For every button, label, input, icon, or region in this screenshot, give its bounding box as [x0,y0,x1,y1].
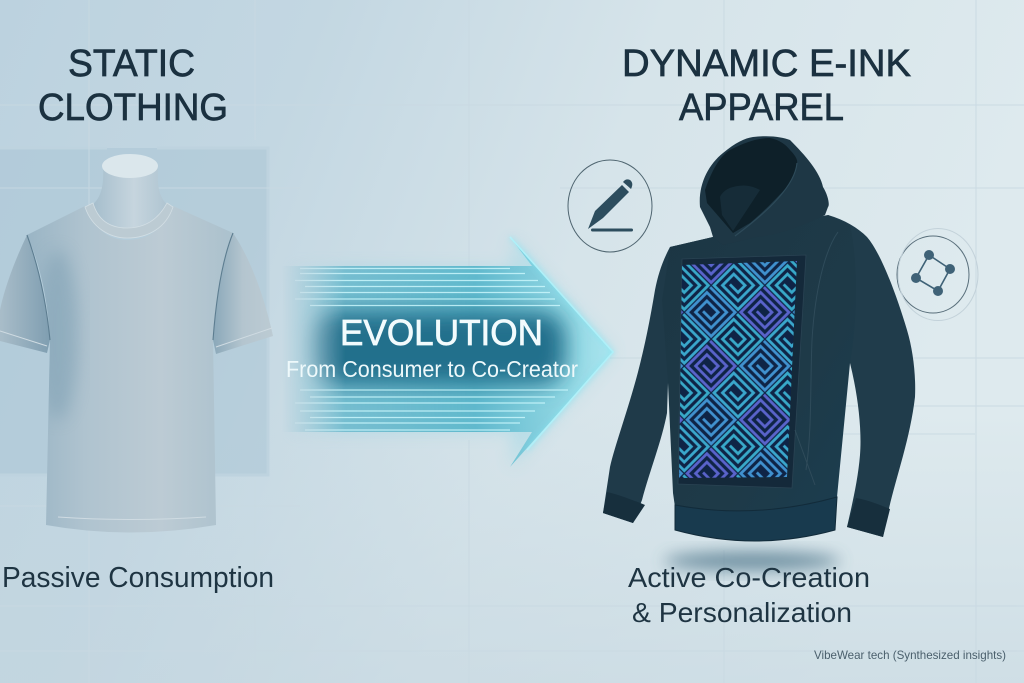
arrow tip glow [510,237,613,450]
mannequin neck [90,154,170,232]
evolution arrow [270,237,613,467]
t-shirt hem details [0,328,272,520]
hoodie torso [662,215,856,541]
white t-shirt on mannequin [0,154,273,532]
hood [700,136,829,245]
title: dynamic e-ink apparel [622,43,911,129]
hoodie left sleeve [603,237,713,523]
icon: network nodes in circle [897,228,978,320]
caption: active co-creation and personalization: & Personalization [632,597,852,628]
arrow heading: evolution: EVOLUTION [340,312,543,353]
arrow glow [322,246,610,461]
t-shirt right sleeve [213,233,273,354]
source credit: VibeWear tech (Synthesized insights) [814,648,1006,662]
icon: pencil in circle [568,160,652,252]
arrow dark core [310,312,565,384]
t-shirt left sleeve [0,235,50,353]
t-shirt body [27,206,233,532]
caption: active co-creation and personalization: Active Co-Creation [628,562,870,593]
hoodie ground shadow [664,552,840,570]
arrow body [270,237,613,467]
caption: passive consumption: Passive Consumption [2,562,274,594]
hoodie seams [795,232,838,485]
title: static clothing [38,43,228,129]
title: static clothing: STATIC [68,43,195,85]
e-ink hoodie [603,136,915,541]
title: static clothing: CLOTHING [38,87,228,129]
caption: active co-creation and personalization [628,562,870,628]
hoodie right sleeve [828,215,915,537]
arrow edge highlight [510,237,613,450]
arrow subheading: From Consumer to Co-Creator [286,356,578,382]
display panel frame [678,255,806,488]
arrow speed lines [295,268,568,430]
hoodie cuffs [603,492,890,537]
title: dynamic e-ink apparel: DYNAMIC E-INK [622,43,911,85]
hoodie hem band [675,497,837,541]
t-shirt collar [85,203,173,238]
title: dynamic e-ink apparel: APPAREL [679,87,844,129]
e-ink geometric pattern [679,261,797,478]
